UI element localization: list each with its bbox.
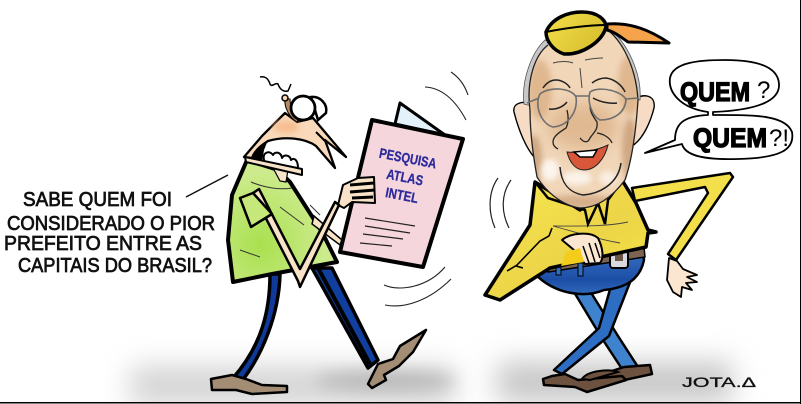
glasses bbox=[527, 89, 638, 127]
magazine title: ATLAS bbox=[385, 166, 425, 188]
shirt creases bbox=[553, 222, 628, 243]
mouth bbox=[567, 145, 608, 170]
raised arm bbox=[632, 173, 733, 260]
motion lines bbox=[384, 72, 468, 306]
forehead lines bbox=[553, 58, 603, 88]
hand bar across neck bbox=[245, 157, 302, 175]
speech text: left character: SABE QUEM FOI bbox=[23, 189, 172, 211]
speech text: left character bbox=[4, 189, 215, 277]
hanging hand bbox=[667, 258, 697, 297]
left character: reader bbox=[211, 72, 468, 394]
neck bbox=[272, 166, 288, 182]
ears bbox=[514, 96, 654, 160]
hair bbox=[524, 28, 640, 106]
sleeve bbox=[240, 193, 272, 227]
shirt creases bbox=[240, 182, 320, 257]
trousers bbox=[534, 246, 644, 294]
nose bbox=[553, 106, 612, 149]
closed eyes bbox=[543, 78, 625, 109]
face bbox=[526, 25, 642, 209]
magazine back page bbox=[395, 103, 445, 135]
speech text: left character: CAPITAIS DO BRASIL? bbox=[18, 255, 212, 277]
face shading bbox=[526, 55, 642, 209]
shoe: front bbox=[368, 330, 426, 388]
right character: mayor bbox=[485, 12, 792, 392]
ear bbox=[282, 95, 288, 101]
hair bbox=[260, 77, 291, 91]
shoe: rear bbox=[211, 375, 287, 394]
bubble punctuation: ?! bbox=[769, 125, 789, 152]
fingers bbox=[350, 183, 375, 198]
shirt collar bbox=[535, 181, 622, 224]
magazine cover bbox=[340, 120, 463, 267]
throat shadow bbox=[247, 140, 268, 162]
bubble question mark: ? bbox=[757, 77, 770, 104]
forearm hand on belly bbox=[561, 234, 602, 266]
fingers on chin bbox=[262, 152, 298, 168]
ear arm of glasses bbox=[285, 99, 299, 122]
speech tail line bbox=[186, 175, 228, 197]
left trouser leg bbox=[574, 291, 638, 372]
belt bbox=[546, 247, 645, 276]
white neck gap bbox=[254, 138, 316, 172]
magazine body lines bbox=[360, 218, 415, 246]
ground shadow bbox=[130, 362, 732, 404]
magazine title: PESQUISA bbox=[378, 145, 438, 171]
back leg bbox=[233, 274, 280, 381]
magazine title: INTEL bbox=[384, 184, 420, 206]
speech text: left character: CONSIDERADO O PIOR bbox=[7, 213, 215, 235]
mouth line bbox=[316, 132, 325, 141]
glasses bbox=[311, 97, 326, 120]
signature: JOTA.Δ bbox=[682, 374, 756, 390]
green shirt bbox=[228, 160, 337, 282]
head bbox=[244, 77, 346, 182]
magazine title bbox=[378, 145, 438, 206]
bubble text 2: QUEM bbox=[693, 123, 767, 153]
bubble text 1: QUEM bbox=[680, 77, 750, 107]
hand holding magazine bbox=[338, 177, 375, 208]
speech text: left character: PREFEITO ENTRE AS bbox=[4, 233, 202, 255]
speech bubbles bbox=[645, 60, 792, 159]
cap bbox=[546, 12, 669, 54]
yellow shirt and arm bbox=[485, 180, 656, 300]
arm bbox=[253, 189, 339, 287]
face outline bbox=[529, 25, 638, 208]
shoes bbox=[543, 365, 652, 392]
right trouser leg bbox=[554, 272, 634, 374]
sleeve fold bbox=[507, 228, 552, 271]
far arm bbox=[312, 216, 342, 245]
head skin bbox=[244, 113, 346, 168]
motion lines bbox=[490, 178, 511, 228]
front leg bbox=[312, 268, 378, 368]
chin line bbox=[560, 163, 621, 195]
